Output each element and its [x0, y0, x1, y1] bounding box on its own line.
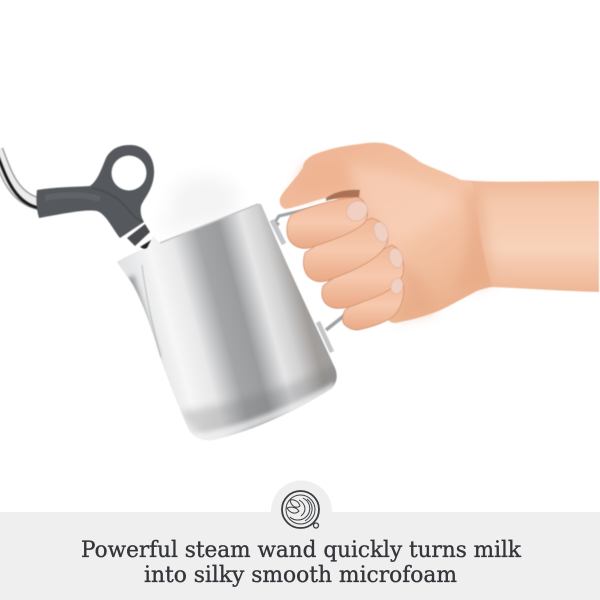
- icon backdrop circle: [271, 480, 332, 542]
- caption text: Powerful steam wand quickly turns milk: [81, 538, 522, 563]
- hand holding the jug: [280, 143, 599, 330]
- caption panel: [0, 480, 600, 600]
- infographic scene: [0, 142, 600, 600]
- milk jug: [117, 204, 345, 450]
- icon: latte art cup: [282, 491, 319, 528]
- ring finger: [322, 245, 404, 308]
- steam: [158, 176, 239, 234]
- jug handle: [272, 205, 350, 352]
- forearm: [462, 180, 599, 295]
- palm and thumb: [280, 143, 492, 323]
- pinky finger: [342, 280, 404, 330]
- thumb web shadow: [326, 190, 360, 201]
- chrome steam pipe: [0, 150, 40, 208]
- caption text: [81, 538, 522, 588]
- caption text: into silky smooth microfoam: [144, 563, 457, 588]
- fingernails: [343, 197, 405, 295]
- index finger: [287, 197, 367, 248]
- middle finger: [303, 218, 388, 282]
- jug shading: [128, 264, 336, 435]
- steam wand rubber grip: [36, 145, 156, 250]
- spout fold: [128, 274, 162, 355]
- hand shading: [300, 161, 492, 320]
